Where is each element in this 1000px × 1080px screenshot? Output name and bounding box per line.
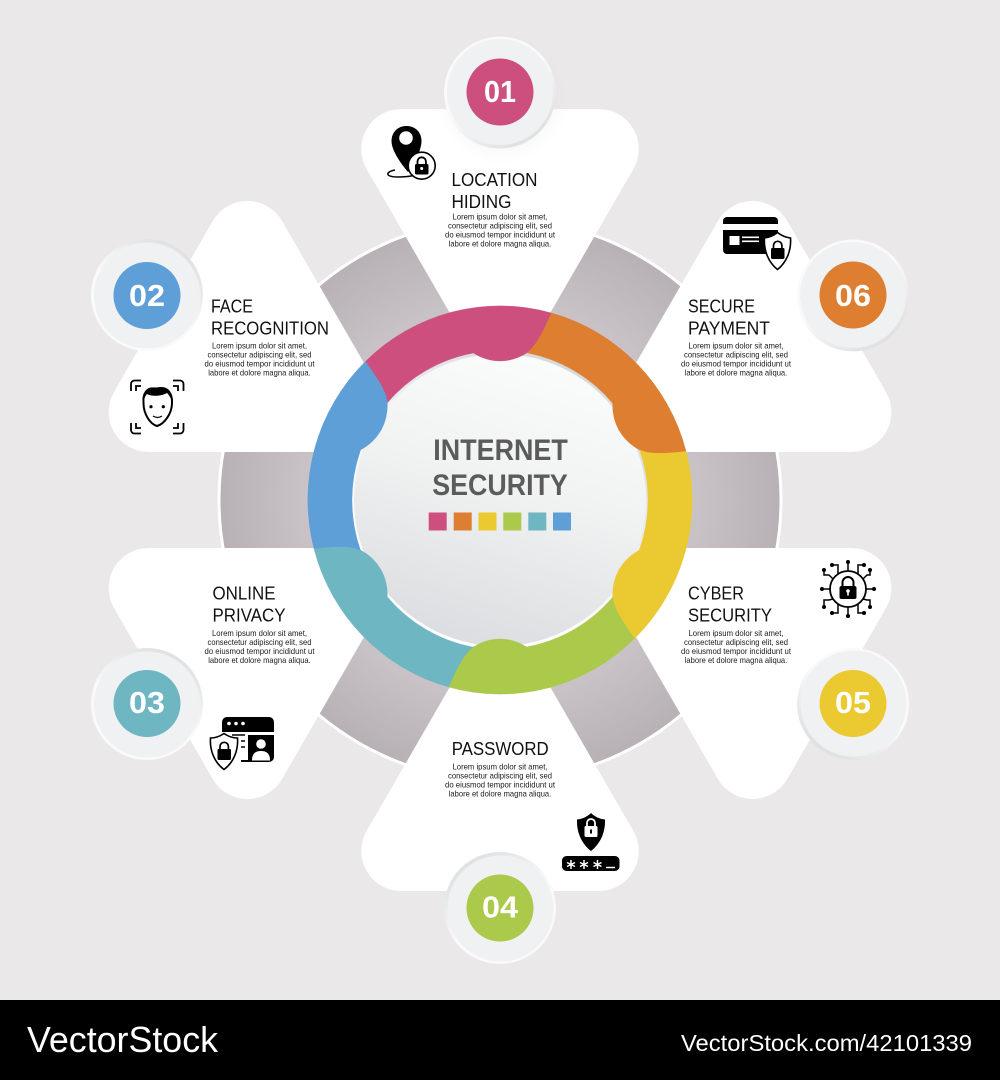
central disc (350, 350, 650, 650)
body text 04 (445, 762, 556, 798)
heading: face recognition: FACE (211, 297, 253, 317)
heading: secure payment: SECURE (688, 297, 755, 317)
badge 03 (71, 628, 223, 780)
body text 04: Lorem ipsum dolor sit amet, (452, 762, 548, 772)
title: SECURITY (432, 469, 568, 502)
heading: online privacy (212, 584, 286, 626)
ring segment: magenta (365, 306, 551, 403)
panel: 03 online privacy (71, 458, 433, 814)
body text 01: labore et dolore magna aliqua. (449, 238, 551, 248)
badge 04 (444, 852, 556, 964)
body text 06: Lorem ipsum dolor sit amet, (688, 340, 784, 350)
badge 05: 05 (835, 685, 871, 720)
heading: secure payment (688, 297, 770, 339)
body text 06: labore et dolore magna aliqua. (685, 368, 787, 378)
heading: cyber security (688, 584, 772, 626)
icon: card with shield (723, 217, 791, 270)
heading: cyber security: SECURITY (688, 606, 772, 626)
title: INTERNET (433, 434, 568, 467)
icon: shield and password field (562, 813, 620, 871)
body text 04: consectetur adipiscing elit, sed (448, 770, 552, 780)
body text 03: do eiusmod tempor incididunt ut (204, 646, 315, 656)
panel: 06 secure payment (567, 186, 909, 542)
body text 02: do eiusmod tempor incididunt ut (204, 358, 315, 368)
body text 01 (445, 212, 556, 248)
body text 01: do eiusmod tempor incididunt ut (445, 230, 556, 240)
icon: circuit lock (820, 560, 876, 618)
ring segment: orange (516, 285, 692, 497)
body text 01: consectetur adipiscing elit, sed (448, 220, 552, 230)
body text 03 (204, 628, 315, 665)
body text 05: do eiusmod tempor incididunt ut (681, 646, 792, 656)
badge 01: 01 (484, 74, 516, 109)
ring segment: green (449, 597, 635, 694)
colour ring (266, 285, 734, 715)
heading: secure payment: PAYMENT (688, 319, 770, 339)
body text 03: Lorem ipsum dolor sit amet, (212, 628, 307, 638)
badge 03: 03 (129, 685, 165, 720)
icon: browser with shield (210, 717, 274, 770)
body text 05: labore et dolore magna aliqua. (685, 655, 787, 665)
body text 04: do eiusmod tempor incididunt ut (445, 780, 556, 790)
icon: location pin with lock (388, 126, 435, 179)
body text 01: Lorem ipsum dolor sit amet, (452, 212, 548, 222)
panel: 04 password (361, 660, 639, 964)
body text 02: consectetur adipiscing elit, sed (208, 350, 312, 360)
badge 01 (444, 36, 558, 153)
heading: online privacy: ONLINE (212, 584, 276, 604)
ring segment: yellow (557, 431, 734, 642)
heading: face recognition (211, 297, 329, 339)
footer brand: VectorStock (27, 1019, 219, 1060)
body text 02: Lorem ipsum dolor sit amet, (212, 340, 307, 350)
panel: 02 face recognition (91, 186, 433, 542)
ring segment: teal (308, 503, 484, 715)
body text 06: do eiusmod tempor incididunt ut (681, 358, 792, 368)
footer bar (0, 1000, 1000, 1080)
heading: location hiding: LOCATION (452, 170, 538, 190)
title (432, 434, 568, 502)
ring segment: blue (266, 358, 443, 569)
panel: 05 cyber security (567, 458, 909, 814)
heading: location hiding: HIDING (452, 192, 512, 212)
footer image id: VectorStock.com/42101339 (681, 1030, 972, 1056)
body text 05 (681, 628, 792, 665)
panel: 01 location hiding (361, 36, 639, 340)
badge 02: 02 (129, 278, 165, 313)
badge 06 (797, 240, 909, 352)
body text 04: labore et dolore magna aliqua. (449, 788, 551, 798)
heading: online privacy: PRIVACY (212, 606, 286, 626)
body text 02 (204, 340, 315, 378)
body text 02: labore et dolore magna aliqua. (208, 368, 311, 378)
body text 03: consectetur adipiscing elit, sed (208, 637, 312, 647)
body text 06: consectetur adipiscing elit, sed (684, 350, 788, 360)
heading: face recognition: RECOGNITION (211, 319, 329, 339)
body text 03: labore et dolore magna aliqua. (208, 655, 311, 665)
grey annulus behind panels (219, 219, 781, 781)
heading: cyber security: CYBER (688, 584, 744, 604)
heading: password: PASSWORD (452, 739, 549, 759)
badge 02 (91, 239, 203, 351)
heading: location hiding (452, 170, 538, 212)
colour legend squares (429, 512, 571, 530)
body text 05: consectetur adipiscing elit, sed (684, 637, 788, 647)
badge 06: 06 (835, 278, 871, 313)
body text 06 (681, 340, 792, 378)
body text 05: Lorem ipsum dolor sit amet, (688, 628, 784, 638)
badge 04: 04 (482, 890, 519, 924)
icon: face scan (131, 380, 184, 434)
badge 05 (797, 648, 909, 760)
